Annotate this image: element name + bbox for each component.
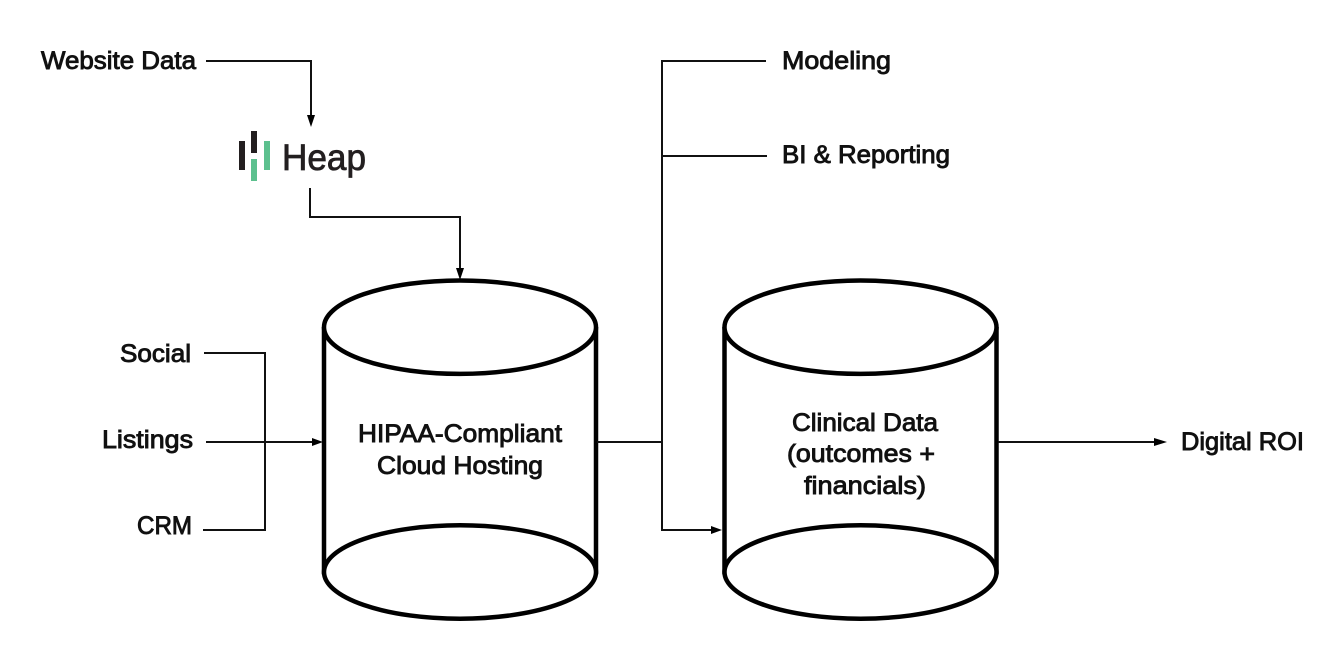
icon: Heap logo: [239, 131, 366, 181]
arrow: Heap to cloud hosting: [310, 188, 464, 280]
arrow: clinical data to Digital ROI: [998, 438, 1167, 446]
cylinder label: financials): [804, 472, 926, 500]
cylinder label: [787, 409, 938, 500]
label: BI & Reporting: BI & Reporting: [782, 141, 950, 169]
icon: Heap logo: Heap: [282, 137, 366, 178]
label: Digital ROI: Digital ROI: [1181, 428, 1304, 456]
cylinder: clinical data: [724, 280, 996, 619]
connector: cloud hosting to outputs: [597, 61, 767, 534]
cylinder label: HIPAA-Compliant: [358, 420, 562, 448]
label: CRM: CRM: [137, 512, 192, 540]
arrow: Website Data to Heap: [206, 61, 315, 127]
cylinder label: [358, 420, 562, 480]
cylinder label: (outcomes +: [787, 440, 935, 468]
cylinder: HIPAA-compliant cloud hosting: [324, 280, 596, 619]
cylinder label: Cloud Hosting: [377, 452, 543, 480]
label: Listings: Listings: [102, 426, 193, 454]
label: Social: Social: [120, 340, 191, 368]
arrow: Listings to cloud hosting: [206, 438, 323, 446]
label: Website Data: Website Data: [41, 47, 196, 75]
connector: Social and CRM bracket: [203, 353, 265, 530]
cylinder label: Clinical Data: [792, 409, 938, 437]
label: Modeling: Modeling: [782, 47, 891, 75]
